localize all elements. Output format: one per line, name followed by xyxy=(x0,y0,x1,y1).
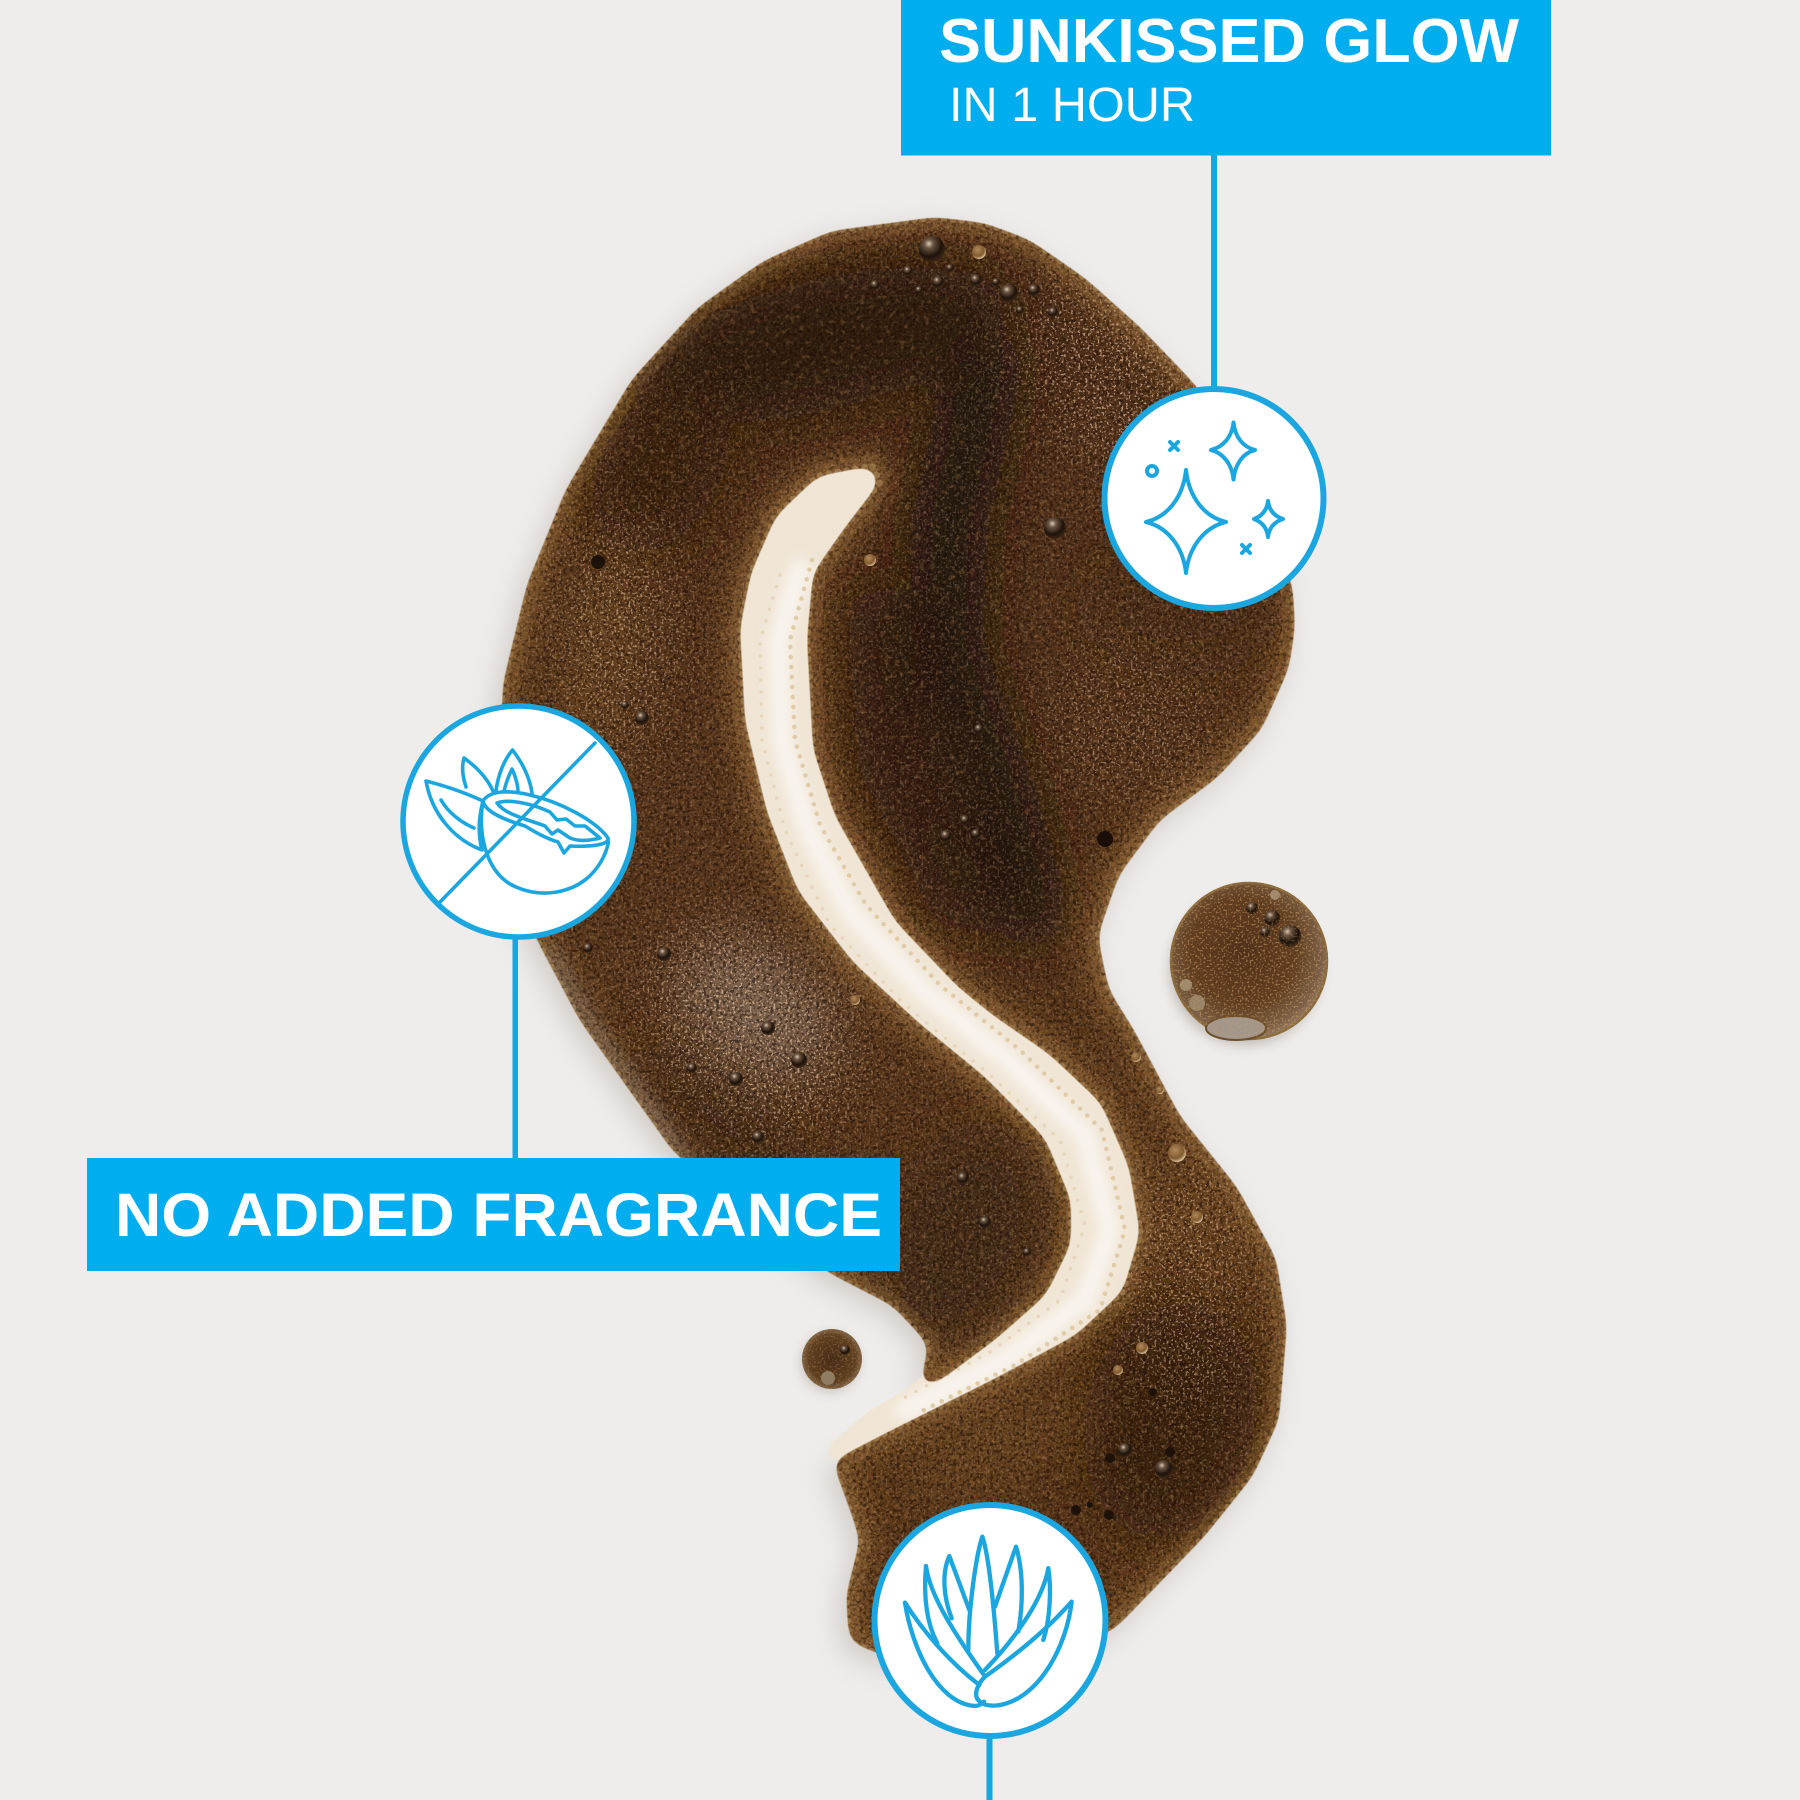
connector: no added fragrance xyxy=(512,938,518,1159)
label: sunkissed glow in 1 hour: SUNKISSED GLOW xyxy=(939,7,1519,76)
dark shaded folds xyxy=(563,236,1278,1555)
large foam droplet xyxy=(1163,882,1328,1052)
foam grain xyxy=(480,200,1320,1700)
icon: aloe plant xyxy=(874,1505,1106,1736)
cream ribbon xyxy=(730,465,1150,1466)
golden rim of swatch xyxy=(498,217,1295,1680)
foam bubbles xyxy=(583,236,1203,1520)
connector: sunkissed glow xyxy=(1211,155,1217,387)
label: sunkissed glow in 1 hour xyxy=(901,0,1551,156)
small foam droplet xyxy=(800,1328,864,1392)
foam cells along the edge xyxy=(498,217,1295,1680)
label: sunkissed glow in 1 hour: IN 1 HOUR xyxy=(949,79,1195,132)
label: no added fragrance xyxy=(87,1158,900,1271)
icon: sparkles xyxy=(1104,389,1324,608)
light sheen patches xyxy=(539,525,1270,1518)
cast shadow of swatch xyxy=(491,226,1288,1689)
greyish lower-left lip xyxy=(545,950,680,1160)
label: no added fragrance: NO ADDED FRAGRANCE xyxy=(115,1181,882,1249)
connector: aloe xyxy=(986,1738,992,1800)
icon: crossed-out coconut xyxy=(403,706,634,937)
main brown foam swatch xyxy=(502,218,1295,1653)
